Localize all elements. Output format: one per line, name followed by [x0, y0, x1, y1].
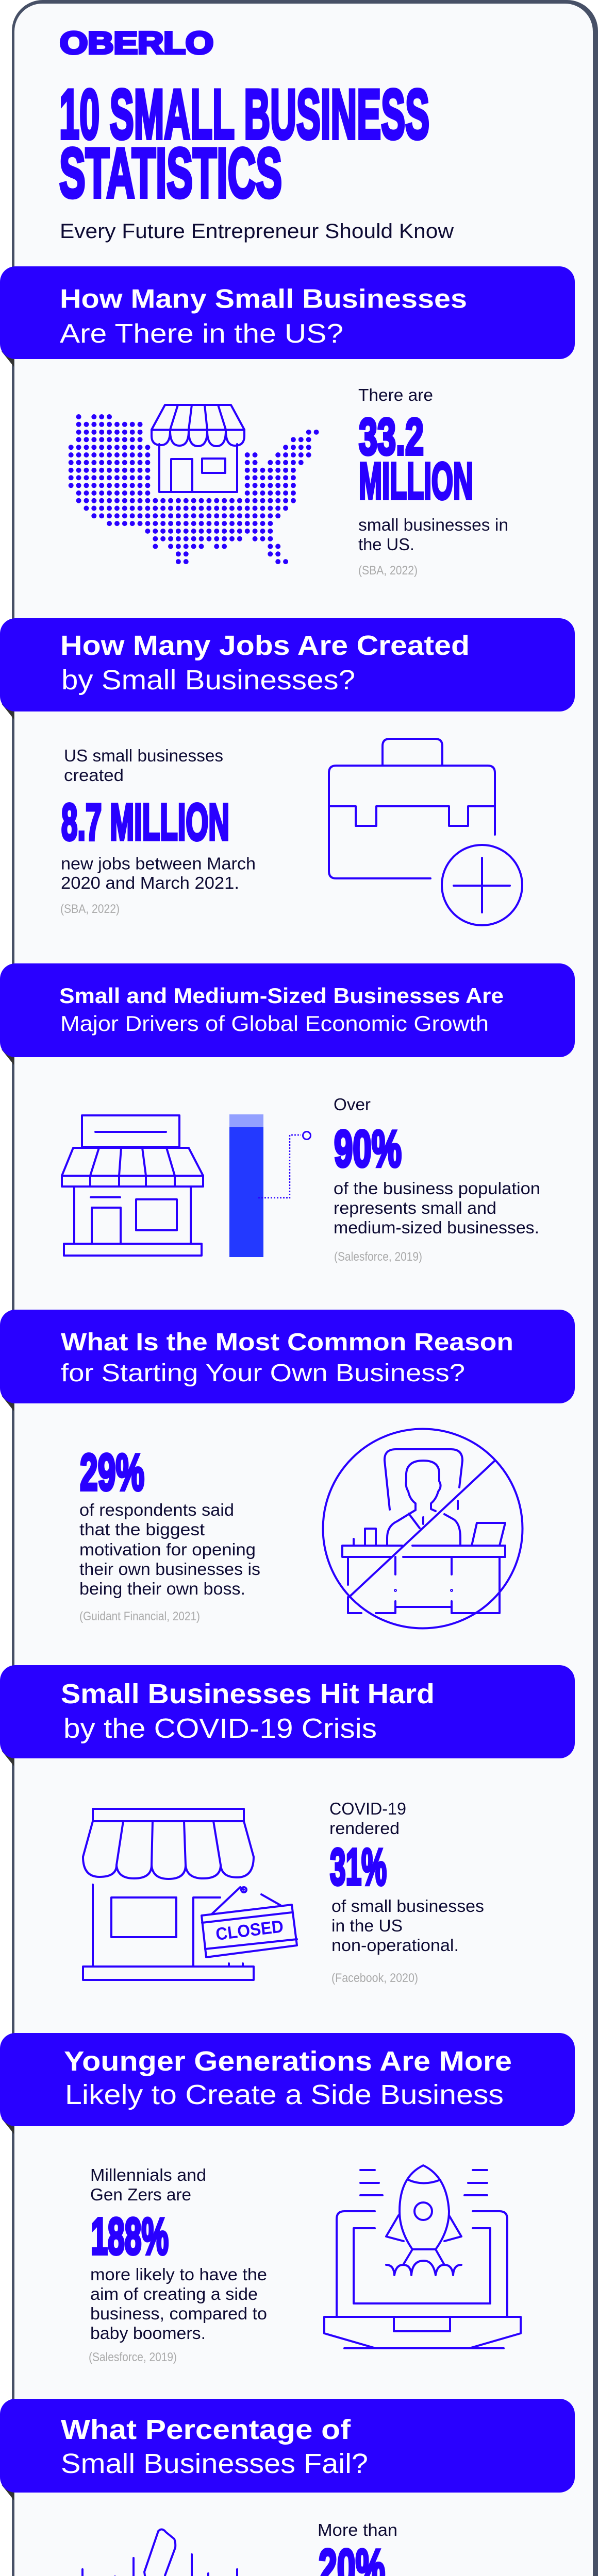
stat text: 8.7 million — [60, 746, 256, 916]
stat text: 188 percent: baby boomers. — [90, 2324, 206, 2343]
banner heading — [0, 963, 575, 1065]
stat text: 90 percent: 90% — [334, 1120, 402, 1178]
stat text: 8.7 million: new jobs between March — [61, 854, 256, 873]
banner heading — [0, 618, 575, 719]
stat text: 29 percent: of respondents said — [79, 1500, 234, 1519]
banner heading — [0, 1665, 575, 1766]
stat text: 90 percent: medium-sized businesses. — [334, 1218, 539, 1237]
chart: 90 percent bar — [229, 1114, 310, 1257]
panel: SMB global growth — [0, 963, 575, 1264]
stat text: 33.2 million: 33.2 — [359, 408, 424, 466]
panel: younger generations — [0, 2033, 575, 2364]
stat text: 188 percent: Millennials and — [90, 2165, 206, 2184]
stat text: 90 percent: (Salesforce, 2019) — [334, 1250, 422, 1264]
icon: storefront — [62, 1115, 203, 1256]
banner heading: Are There in the US? — [60, 319, 343, 349]
icon: crossed-out boss at desk — [323, 1429, 523, 1628]
stat text: 8.7 million: US small businesses — [64, 746, 223, 765]
icon: closed store — [83, 1809, 297, 1980]
panel: reason for starting — [0, 1310, 575, 1628]
banner heading: by Small Businesses? — [61, 665, 355, 696]
banner heading: Small Businesses Hit Hard — [61, 1679, 435, 1709]
banner heading: How Many Small Businesses — [60, 284, 467, 314]
stat text: 188 percent: 188% — [91, 2208, 169, 2265]
stat text: 31 percent — [329, 1799, 484, 1985]
stat text: 33.2 million — [358, 385, 508, 578]
stat text: 90 percent: Over — [334, 1095, 371, 1114]
icon: falling person — [67, 2529, 274, 2576]
banner heading: What Is the Most Common Reason — [61, 1329, 513, 1356]
stat text: 188 percent: more likely to have the — [90, 2265, 267, 2284]
stat text: 31 percent: COVID-19 — [329, 1799, 406, 1818]
stat text: 29 percent: being their own boss. — [79, 1579, 245, 1598]
panel: how many small businesses — [0, 266, 575, 578]
stat text: 33.2 million: the US. — [358, 535, 414, 554]
stat text: 90 percent — [334, 1095, 540, 1264]
banner heading: for Starting Your Own Business? — [61, 1360, 465, 1387]
stat text: 31 percent: rendered — [329, 1819, 400, 1838]
banner heading — [0, 266, 575, 367]
stat text: 8.7 million: 8.7 MILLION — [61, 793, 229, 851]
stat text: 188 percent — [89, 2165, 267, 2364]
panel: percentage failing — [0, 2399, 575, 2576]
banner heading: What Percentage of — [61, 2414, 351, 2445]
title: STATISTICS — [59, 134, 282, 212]
title — [59, 75, 429, 212]
stat text: 33.2 million: MILLION — [359, 452, 473, 510]
stat text: 20 percent: More than — [318, 2520, 397, 2539]
banner heading: Younger Generations Are More — [64, 2046, 512, 2077]
stat text: 31 percent: in the US — [331, 1916, 403, 1935]
banner heading — [0, 1310, 575, 1411]
stat text: 8.7 million: (SBA, 2022) — [60, 902, 120, 916]
banner heading — [0, 2033, 575, 2134]
panel: covid crisis — [0, 1665, 575, 1985]
stat text: 20 percent — [318, 2520, 517, 2576]
stat text: 29 percent: motivation for opening — [79, 1540, 256, 1559]
banner heading: Likely to Create a Side Business — [65, 2079, 504, 2110]
icon: dotted US map with shop — [71, 405, 317, 562]
banner heading — [0, 2399, 575, 2500]
stat text: 31 percent: non-operational. — [331, 1936, 459, 1955]
stat text: 90 percent: of the business population — [334, 1179, 540, 1198]
stat text: 188 percent: aim of creating a side — [90, 2284, 258, 2303]
banner heading: by the COVID-19 Crisis — [63, 1713, 377, 1744]
stat text: 188 percent: business, compared to — [90, 2304, 267, 2323]
logo: Oberlo: OBERLO — [60, 26, 213, 60]
banner heading: Major Drivers of Global Economic Growth — [60, 1011, 489, 1036]
stat text: 29 percent — [79, 1444, 260, 1623]
stat text: 29 percent: (Guidant Financial, 2021) — [79, 1609, 200, 1623]
stat text: 8.7 million: 2020 and March 2021. — [61, 873, 239, 892]
stat text: 8.7 million: created — [64, 766, 124, 785]
banner heading: Small Businesses Fail? — [61, 2448, 368, 2479]
subtitle: Every Future Entrepreneur Should Know — [60, 220, 454, 243]
stat text: 31 percent: of small businesses — [331, 1896, 484, 1916]
panel: jobs created — [0, 618, 575, 925]
stat text: 33.2 million: There are — [358, 385, 433, 404]
icon: briefcase with plus — [329, 739, 522, 925]
icon: closed store: CLOSED — [214, 1917, 285, 1944]
stat text: 31 percent: 31% — [330, 1838, 387, 1896]
stat text: 31 percent: (Facebook, 2020) — [331, 1971, 418, 1985]
stat text: 188 percent: (Salesforce, 2019) — [89, 2350, 177, 2364]
stat text: 90 percent: represents small and — [334, 1198, 496, 1217]
stat text: 33.2 million: (SBA, 2022) — [358, 564, 418, 578]
banner heading: How Many Jobs Are Created — [60, 630, 470, 661]
stat text: 29 percent: that the biggest — [79, 1520, 205, 1539]
stat text: 29 percent: 29% — [80, 1444, 144, 1501]
stat text: 29 percent: their own businesses is — [79, 1560, 260, 1579]
stat text: 188 percent: Gen Zers are — [90, 2185, 191, 2204]
banner heading: Small and Medium-Sized Businesses Are — [59, 984, 504, 1008]
icon: rocket launching from laptop — [324, 2165, 521, 2348]
stat text: 33.2 million: small businesses in — [358, 515, 508, 534]
